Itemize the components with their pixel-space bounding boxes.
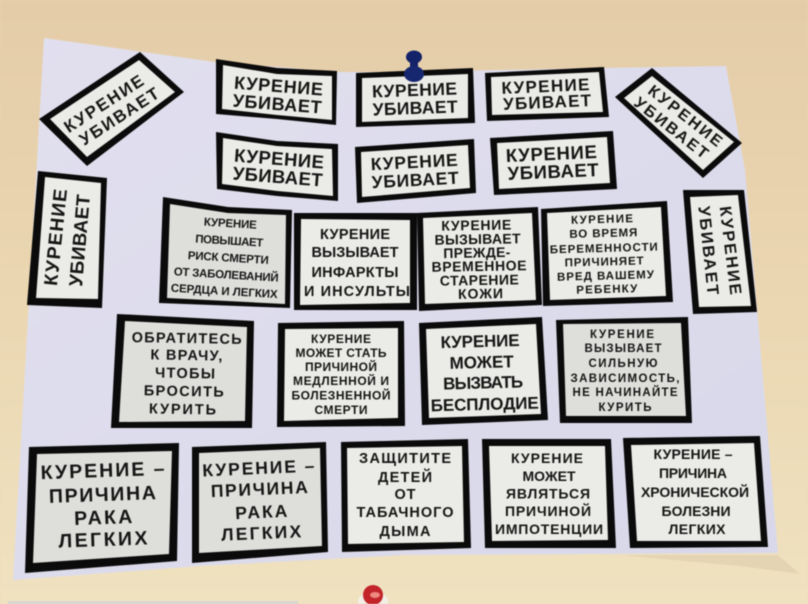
sign: second row 2: КУРЕНИЕ — [370, 150, 458, 174]
sign: premature skin ageing — [417, 207, 542, 311]
sign: premature skin ageing: ВЫЗЫВАЕТ — [434, 230, 521, 248]
sign: heart disease risk: РИСК СМЕРТИ — [187, 250, 269, 267]
sign: protect children: ОТ — [394, 487, 416, 503]
sign: top-left diamond: КУРЕНИЕ — [61, 71, 147, 137]
sign: top-right diamond: УБИВАЕТ — [630, 94, 711, 163]
sign: second row 1 — [216, 132, 338, 201]
sign: right vertical — [683, 190, 757, 314]
sign: see a doctor: БРОСИТЬ — [144, 383, 224, 401]
sign: second row 2 — [355, 139, 476, 203]
sign: harm during pregnancy: ВРЕД ВАШЕМУ — [557, 269, 655, 284]
sign: lung cancer 2 — [192, 442, 328, 563]
icon: red pin at bottom edge — [358, 585, 388, 604]
sign: heart disease risk: СЕРДЦА И ЛЕГКИХ — [170, 283, 278, 301]
sign: lung cancer 2: КУРЕНИЕ – — [202, 456, 315, 480]
sign: top-left diamond: УБИВАЕТ — [76, 84, 163, 149]
sign: impotence: КУРЕНИЕ — [511, 450, 583, 466]
sign: left vertical: КУРЕНИЕ — [41, 188, 72, 287]
sign: top row 2: КУРЕНИЕ — [372, 79, 457, 101]
sign: heart disease risk — [159, 197, 292, 308]
sign: chronic lung disease: ХРОНИЧЕСКОЙ — [641, 483, 749, 500]
sign: protect children: ДЕТЕЙ — [378, 468, 432, 486]
sign: heart attacks and strokes: КУРЕНИЕ — [320, 227, 390, 243]
sign: top row 3: КУРЕНИЕ — [501, 75, 590, 98]
sign: harm during pregnancy: КУРЕНИЕ — [571, 213, 633, 227]
sign: premature skin ageing: ПРЕЖДЕ- — [443, 244, 511, 261]
sign: slow painful death: БОЛЕЗНЕННОЙ — [292, 388, 390, 402]
sign: heart attacks and strokes: ИНФАРКТЫ — [312, 265, 398, 281]
sign: impotence — [482, 439, 616, 548]
sign: slow painful death: МЕДЛЕННОЙ И — [293, 373, 389, 388]
sign: see a doctor: К ВРАЧУ, — [150, 347, 223, 365]
sign: slow painful death: ПРИЧИНОЙ — [305, 359, 377, 374]
sign: lung cancer 1 — [25, 443, 179, 573]
sign: heart disease risk: ОТ ЗАБОЛЕВАНИЙ — [173, 265, 279, 285]
sign: second row 3: КУРЕНИЕ — [505, 141, 597, 166]
sign: top row 3: УБИВАЕТ — [503, 91, 592, 114]
sign: see a doctor: КУРИТЬ — [149, 401, 216, 419]
sign: infertility: БЕСПЛОДИЕ — [430, 394, 539, 415]
sign: premature skin ageing: КОЖИ — [458, 285, 503, 302]
sign: slow painful death: МОЖЕТ СТАТЬ — [296, 346, 387, 360]
sign: chronic lung disease: КУРЕНИЕ – — [654, 446, 733, 462]
sign: premature skin ageing: ВРЕМЕННОЕ — [431, 257, 527, 275]
sign: second row 3: УБИВАЕТ — [507, 159, 600, 184]
sign: premature skin ageing: КУРЕНИЕ — [441, 216, 511, 234]
sign: strong addiction: ВЫЗЫВАЕТ — [584, 343, 662, 355]
sign: see a doctor: ОБРАТИТЕСЬ — [132, 330, 242, 348]
sign: harm during pregnancy: БЕРЕМЕННОСТИ — [550, 242, 658, 256]
sign: lung cancer 1: КУРЕНИЕ – — [40, 458, 165, 484]
sign: top row 1: УБИВАЕТ — [232, 91, 322, 117]
sign: second row 1: УБИВАЕТ — [232, 162, 324, 191]
sign: chronic lung disease: ЛЕГКИХ — [668, 521, 726, 537]
paper shadow — [620, 555, 800, 574]
sign: top row 3 — [485, 67, 609, 121]
sign: lung cancer 2: ПРИЧИНА — [210, 477, 309, 501]
sign: protect children: ЗАЩИТИТЕ — [359, 451, 451, 467]
sign: lung cancer 1: РАКА — [74, 506, 133, 530]
sign: top row 1: КУРЕНИЕ — [233, 73, 324, 100]
sign: impotence: ИМПОТЕНЦИИ — [495, 521, 603, 537]
sign: impotence: ЯВЛЯТЬСЯ — [506, 486, 590, 502]
sign: impotence: ПРИЧИНОЙ — [505, 502, 591, 519]
sign: impotence: МОЖЕТ — [522, 468, 576, 484]
sign: harm during pregnancy: ВО ВРЕМЯ — [569, 227, 638, 241]
sign: top row 2 — [356, 68, 475, 127]
sign: strong addiction — [556, 317, 692, 423]
sign: strong addiction: НЕ НАЧИНАЙТЕ — [572, 386, 678, 399]
sign: protect children — [341, 439, 471, 552]
sign: heart attacks and strokes: И ИНСУЛЬТЫ — [304, 284, 410, 300]
sign: heart disease risk: КУРЕНИЕ — [204, 217, 257, 232]
sign: top-left diamond — [39, 52, 184, 166]
sign: slow painful death: КУРЕНИЕ — [311, 332, 371, 346]
sign: see a doctor — [111, 314, 254, 428]
sign: harm during pregnancy — [541, 201, 673, 306]
sign: lung cancer 2: ЛЕГКИХ — [221, 521, 302, 545]
sign: strong addiction: ЗАВИСИМОСТЬ, — [570, 373, 680, 385]
sign: chronic lung disease: БОЛЕЗНИ — [662, 503, 730, 519]
sign: harm during pregnancy: ПРИЧИНЯЕТ — [564, 255, 644, 270]
sign: lung cancer 1: ПРИЧИНА — [49, 482, 156, 508]
sign: strong addiction: КУРИТЬ — [598, 402, 652, 414]
sign: see a doctor: ЧТОБЫ — [155, 365, 215, 383]
sign: slow painful death — [277, 321, 405, 427]
sign: right vertical: УБИВАЕТ — [694, 205, 722, 296]
sign: strong addiction: КУРЕНИЕ — [590, 329, 654, 341]
sign: protect children: ДЫМА — [380, 524, 431, 540]
sign: heart attacks and strokes: ВЫЗЫВАЕТ — [312, 245, 399, 261]
sign: heart disease risk: ПОВЫШАЕТ — [195, 234, 264, 250]
sign: second row 1: КУРЕНИЕ — [233, 145, 325, 173]
sign: infertility: КУРЕНИЕ — [440, 331, 520, 352]
sign: lung cancer 2: РАКА — [235, 501, 288, 523]
icon: blue push pin — [404, 50, 424, 82]
sign: strong addiction: СИЛЬНУЮ — [588, 358, 658, 370]
sign: harm during pregnancy: РЕБЕНКУ — [576, 283, 638, 297]
sign: infertility: МОЖЕТ — [449, 352, 514, 373]
sign: slow painful death: СМЕРТИ — [314, 403, 368, 417]
sign: chronic lung disease — [623, 436, 768, 548]
sign: top row 1 — [216, 59, 337, 125]
sign: heart attacks and strokes — [294, 213, 417, 310]
sign: premature skin ageing: СТАРЕНИЕ — [440, 271, 519, 289]
sign: top-right diamond — [615, 68, 742, 178]
sign: top row 2: УБИВАЕТ — [372, 97, 458, 119]
sign: top-right diamond: КУРЕНИЕ — [644, 82, 725, 151]
sign: left vertical — [27, 171, 107, 308]
sign: left vertical: УБИВАЕТ — [66, 193, 95, 287]
sign: right vertical: КУРЕНИЕ — [716, 205, 744, 296]
objects below poster — [8, 601, 298, 604]
sign: chronic lung disease: ПРИЧИНА — [659, 465, 727, 481]
sign: infertility: ВЫЗВАТЬ — [443, 372, 523, 394]
sign: protect children: ТАБАЧНОГО — [356, 505, 454, 521]
sign: lung cancer 1: ЛЕГКИХ — [58, 527, 148, 553]
sign: second row 3 — [490, 131, 617, 195]
sign: infertility — [419, 317, 548, 425]
sign: second row 2: УБИВАЕТ — [371, 168, 459, 192]
